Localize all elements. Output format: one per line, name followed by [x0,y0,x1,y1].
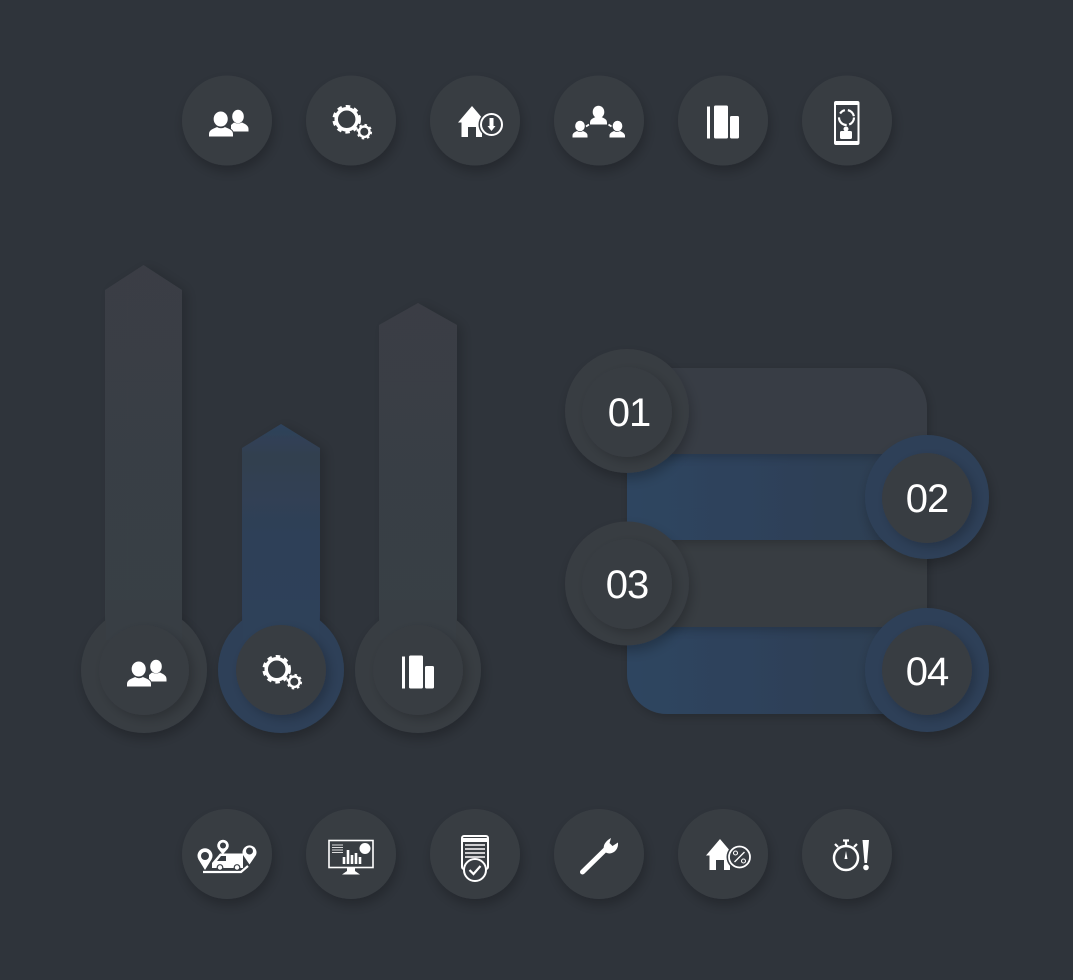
icon: columns [678,76,768,166]
panel: arrow columns chart [81,265,481,733]
icon: smartphone with chart [802,76,892,166]
top icon row [182,76,892,166]
bottom icon row [182,809,892,899]
arrow column 1 [81,265,207,733]
band 2 [627,450,927,540]
step 01: 01 [608,391,650,435]
step 02 [865,435,989,559]
panel: numbered steps [565,349,989,732]
icon: delivery van with map pins [182,809,272,899]
icon: house with percent badge [678,809,768,899]
band 4 [627,620,927,714]
icon: people [182,76,272,166]
icon: house with info badge [430,76,520,166]
arrow column 2 [218,424,344,733]
step 01 [565,349,689,473]
icon: monitor with charts [306,809,396,899]
arrow column 3 [355,303,481,733]
step 04: 04 [906,650,949,694]
icon: stopwatch with exclamation [802,809,892,899]
icon: gears [306,76,396,166]
step 03: 03 [606,563,648,607]
icon: document with check [430,809,520,899]
band 3 [627,534,927,627]
band 1 [627,368,927,454]
icon: network of people [554,76,644,166]
step 02: 02 [906,477,948,521]
step 04 [865,608,989,732]
icon: wrench [554,809,644,899]
step 03 [565,522,689,646]
